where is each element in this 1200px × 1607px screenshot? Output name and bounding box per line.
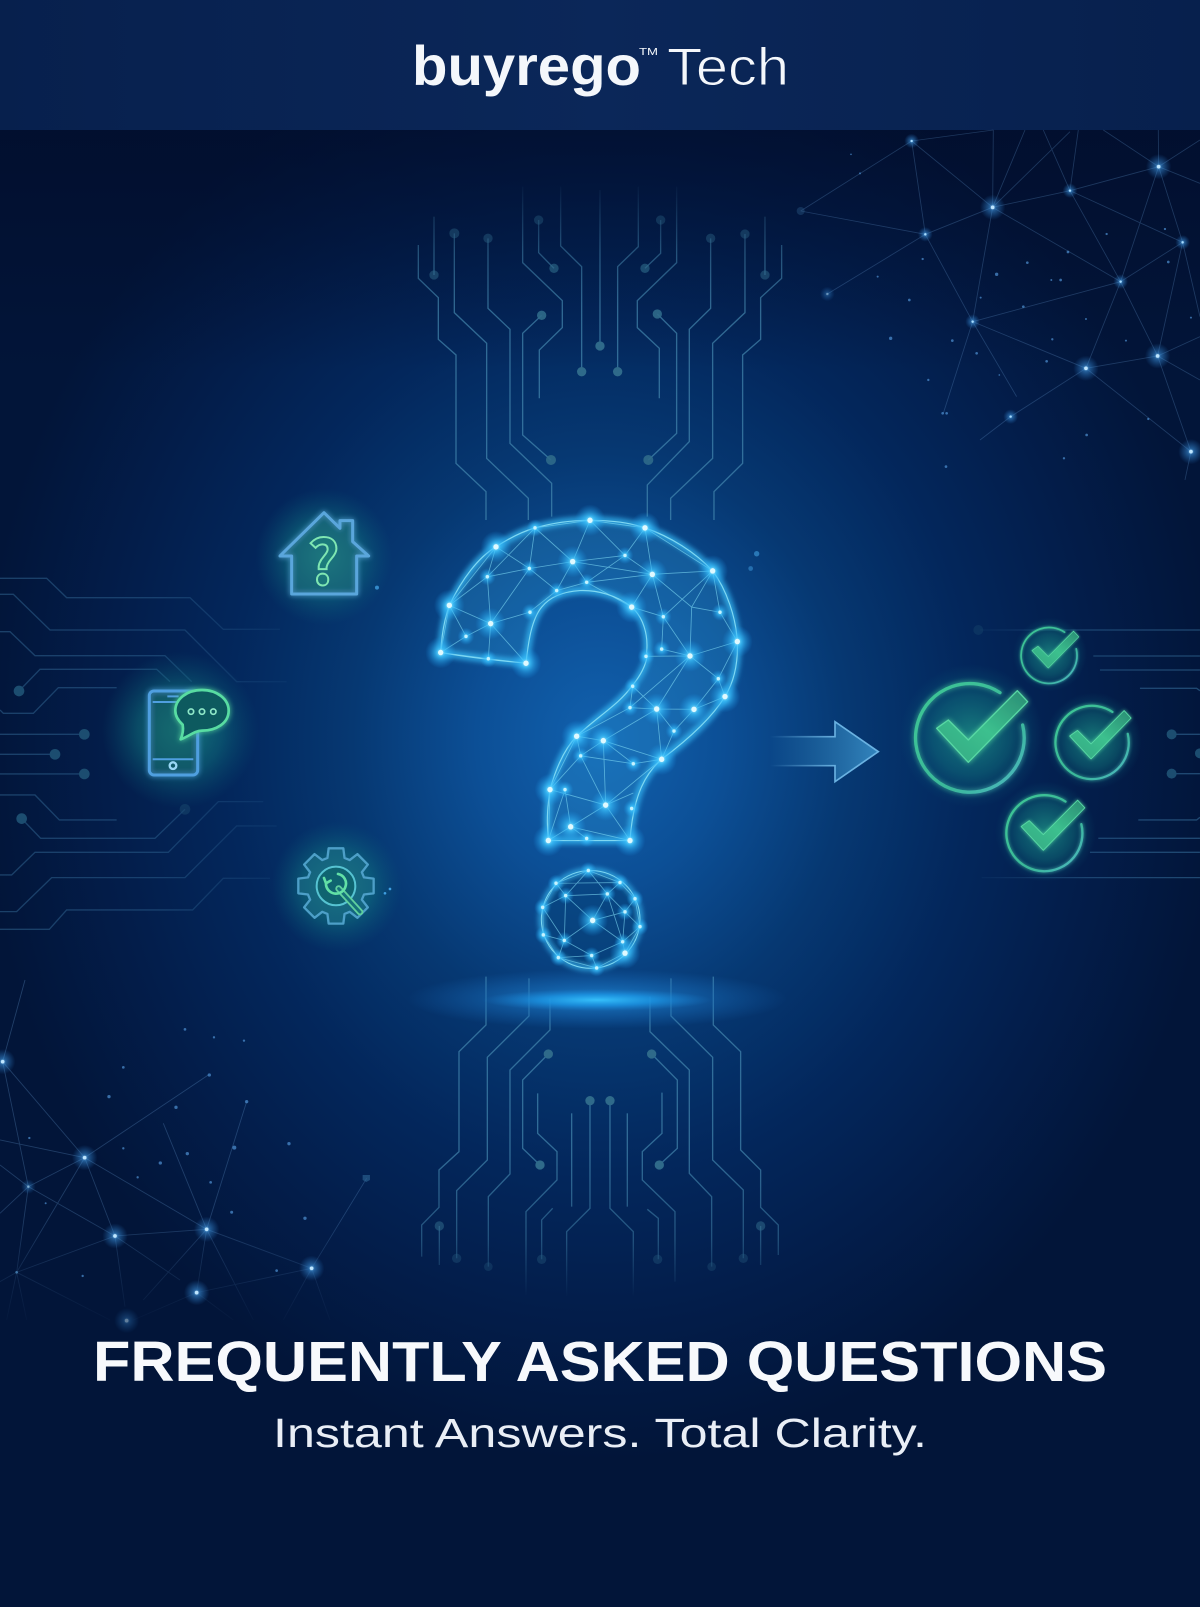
logo: buyrego <box>412 34 641 97</box>
icon: house question <box>256 488 392 625</box>
glowing platform <box>407 969 787 1029</box>
right check <box>1045 693 1142 789</box>
network constellation: bottom left <box>0 980 370 1333</box>
question mark body <box>425 504 759 856</box>
subtitle: Instant Answers. Total Clarity. <box>273 1410 927 1456</box>
question mark hologram <box>425 504 759 977</box>
header bar <box>0 0 1200 130</box>
icon: phone with chat bubble <box>102 652 258 808</box>
question mark dot <box>534 862 648 977</box>
arrow <box>770 722 878 782</box>
icon: check marks cluster <box>900 617 1142 882</box>
circuit traces: bottom <box>422 977 778 1297</box>
title: FREQUENTLY ASKED QUESTIONS <box>93 1330 1107 1394</box>
icon: gear with wrench <box>272 586 402 952</box>
circuit traces: top <box>418 187 782 520</box>
logo <box>412 34 789 97</box>
network constellation: top right <box>797 130 1200 480</box>
logo: TM <box>639 46 658 58</box>
icon: house question: ? <box>308 512 339 602</box>
circuit traces: right <box>973 625 1200 878</box>
logo: Tech <box>667 38 789 97</box>
bottom check <box>995 781 1096 882</box>
large check <box>900 664 1043 807</box>
circuit traces: left <box>0 578 287 929</box>
top check <box>1013 617 1087 691</box>
